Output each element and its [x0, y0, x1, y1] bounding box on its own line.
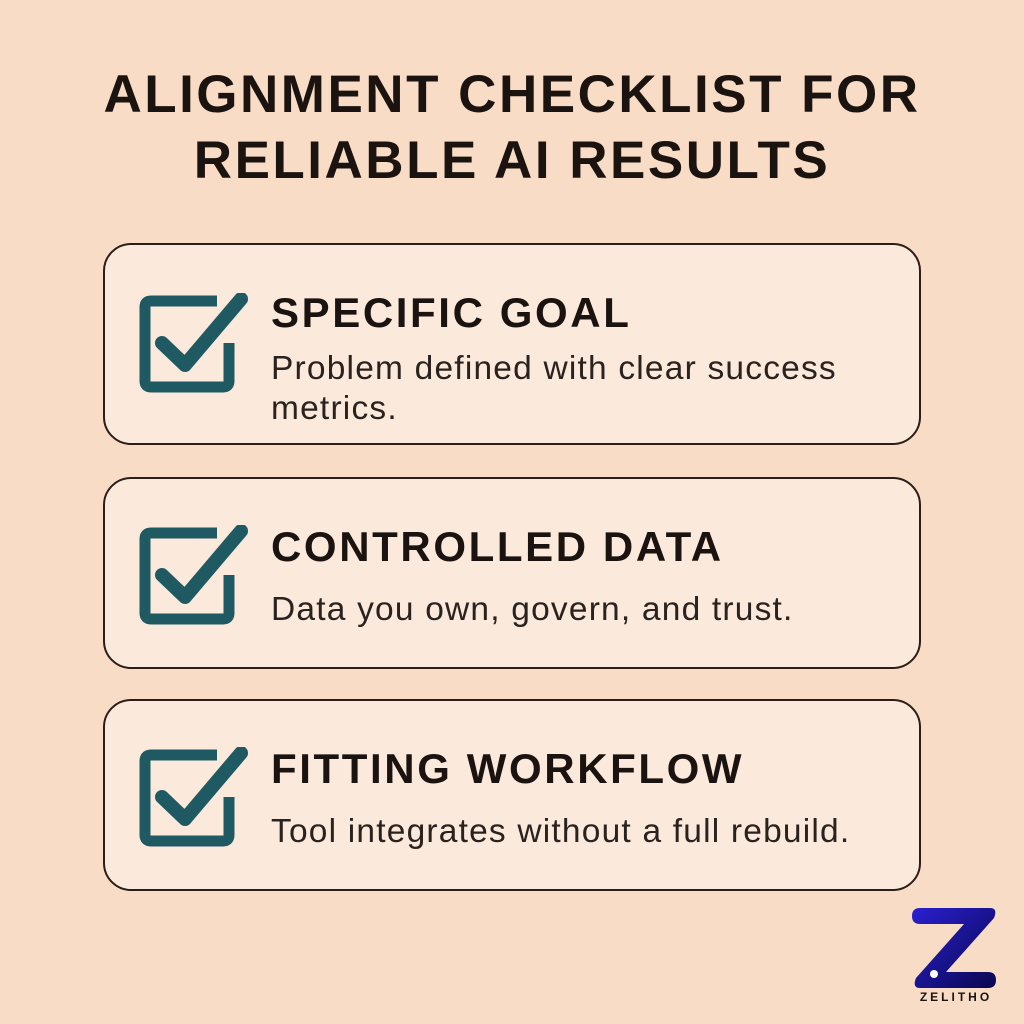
title: RELIABLE AI RESULTS [194, 131, 830, 190]
icon: checkbox [140, 525, 248, 624]
logo: zelitho: ZELITHO [920, 990, 992, 1004]
heading: FITTING WORKFLOW [271, 745, 744, 792]
text [271, 350, 837, 427]
panel: controlled data [103, 477, 921, 669]
panel: fitting workflow [103, 699, 921, 891]
title: ALIGNMENT CHECKLIST FOR [103, 65, 921, 124]
logo: zelitho [912, 908, 996, 1004]
heading: SPECIFIC GOAL [271, 289, 632, 336]
text: Data you own, govern, and trust. [271, 591, 794, 628]
icon: checkbox [140, 293, 248, 392]
title [103, 65, 921, 190]
icon: checkbox [140, 747, 248, 846]
text: Problem defined with clear success [271, 350, 837, 387]
heading: CONTROLLED DATA [271, 523, 724, 570]
text: Tool integrates without a full rebuild. [271, 813, 850, 850]
text: metrics. [271, 390, 398, 427]
panel: specific goal [103, 243, 921, 445]
